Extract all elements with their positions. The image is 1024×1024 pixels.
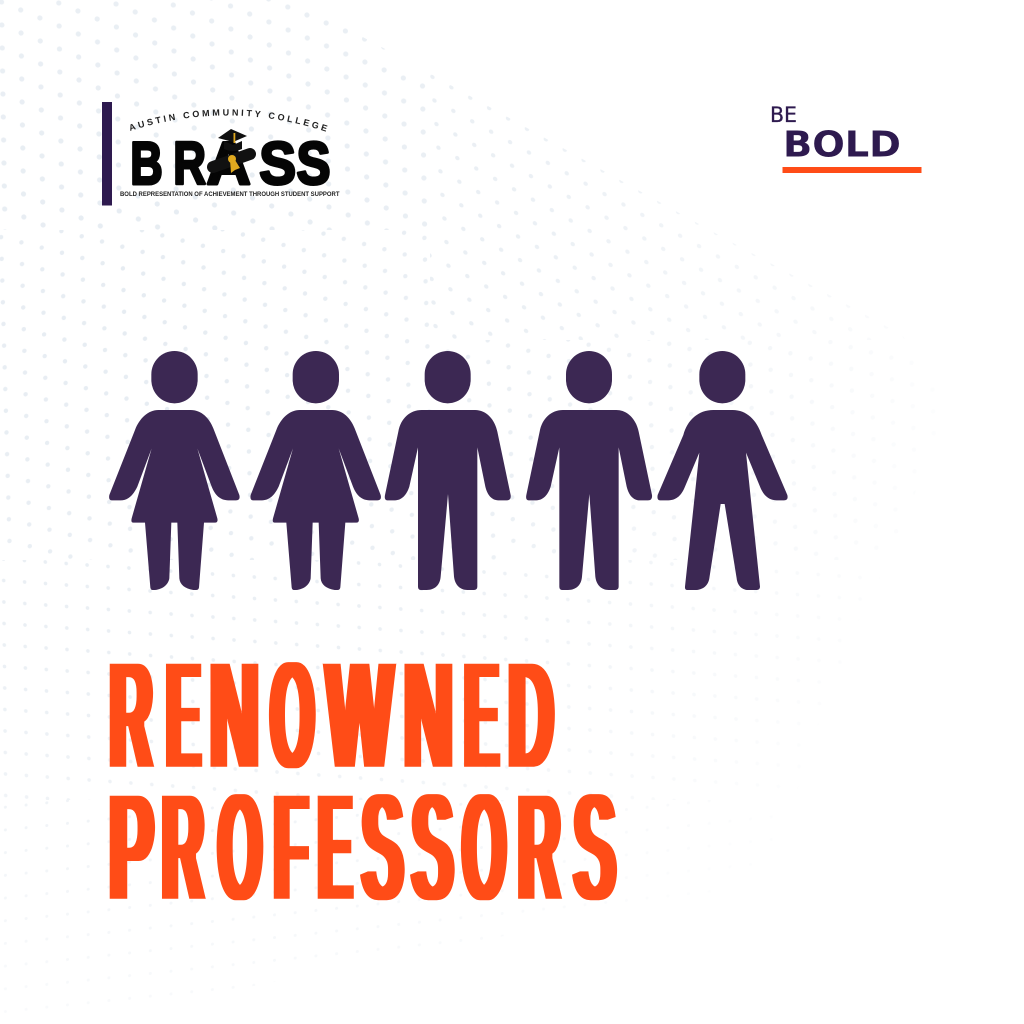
logo wordmark: B (130, 131, 163, 198)
title line 2: S (362, 761, 403, 935)
word: BE: BE (770, 103, 797, 127)
title line 2: S (574, 762, 616, 935)
title line 2: R (162, 760, 204, 934)
logo accent bar (102, 102, 112, 206)
title line 2: P (109, 761, 153, 935)
icon: woman 1 (109, 351, 240, 590)
logo: Be Bold (770, 103, 922, 173)
icon: man 2 (526, 351, 652, 590)
logo wordmark: A (206, 130, 251, 197)
title (109, 628, 616, 935)
title line 1: E (167, 629, 200, 802)
title line 2: O (463, 760, 506, 934)
people row (109, 351, 788, 590)
title line 2: E (318, 761, 352, 934)
logo arc text: AUSTIN COMMUNITY COLLEGE (130, 109, 328, 132)
icon: diploma scroll (213, 154, 250, 173)
underline (782, 167, 922, 173)
logo wordmark: S (296, 130, 331, 197)
icon: man 1 (385, 351, 511, 590)
title line 1: R (110, 629, 152, 802)
title line 1 (110, 628, 554, 803)
title line 2: S (412, 761, 453, 935)
logo wordmark: S (259, 131, 296, 198)
title line 2: O (218, 760, 262, 934)
icon: graduation cap (218, 129, 247, 151)
title line 2: F (274, 759, 308, 934)
title line 2: R (518, 760, 560, 934)
icon: person 5 (657, 351, 788, 590)
title line 1: N (210, 629, 259, 802)
title line 1: W (326, 628, 393, 802)
icon: woman 2 (250, 351, 381, 590)
title line 1: E (465, 629, 498, 802)
logo: BRASS (102, 102, 340, 206)
title line 2 (109, 759, 616, 935)
title line 1: D (508, 630, 554, 803)
background dot field (0, 0, 816, 974)
word: BOLD: BOLD (783, 124, 901, 166)
logo wordmark: R (173, 131, 206, 198)
logo wordmark (130, 130, 331, 198)
title line 1: N (404, 629, 453, 802)
title line 1: O (271, 628, 314, 802)
logo tagline: BOLD REPRESENTATION OF ACHIEVEMENT THROUGH STUDENT SUPPORT (120, 192, 340, 198)
